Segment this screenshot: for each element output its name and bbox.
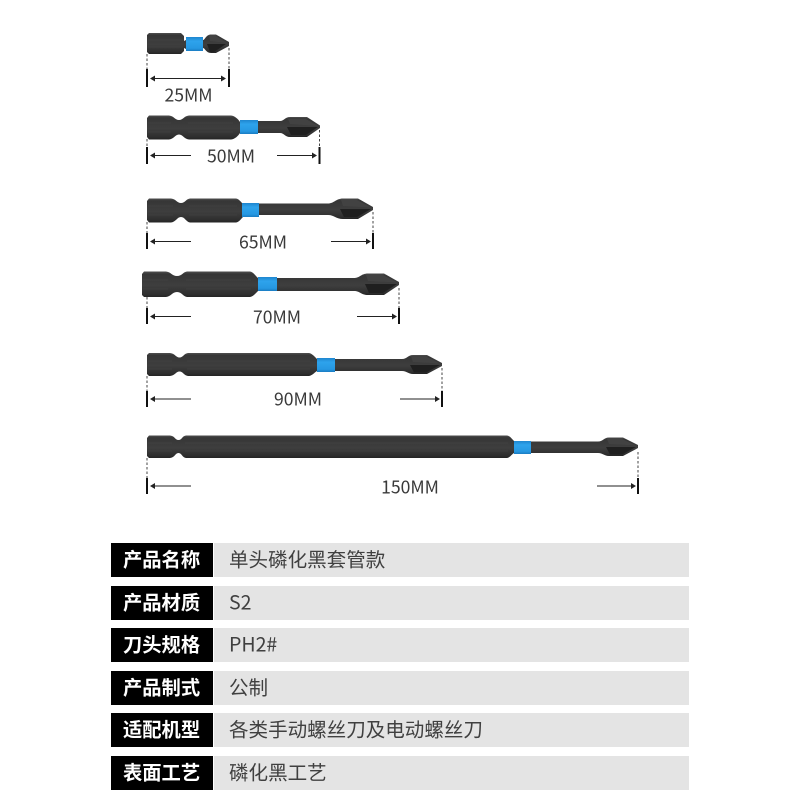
row: material: 产品材质: [123, 588, 200, 616]
bit: 65mm: [147, 198, 373, 222]
dimension: 50MM: 50MM: [207, 144, 255, 168]
row: surface finish: [111, 756, 689, 790]
row: product name: 单头磷化黑套管款: [229, 544, 385, 572]
bit: 50mm: [147, 116, 320, 140]
row: material: S2: [229, 586, 251, 616]
dimension: 90MM: [146, 368, 443, 412]
dimension: 150MM: [146, 452, 639, 500]
row: product name: [111, 543, 689, 577]
dimension: 50MM: [146, 130, 320, 168]
row: bit spec: [111, 628, 689, 662]
dimension: 150MM: 150MM: [381, 474, 439, 500]
row: bit spec: 刀头规格: [123, 630, 200, 658]
row: bit spec: PH2#: [229, 628, 277, 658]
dimension: 90MM: 90MM: [274, 386, 322, 412]
bit: 25mm: [147, 33, 229, 54]
row: surface finish: 表面工艺: [123, 758, 200, 786]
row: compatible tools: 各类手动螺丝刀及电动螺丝刀: [229, 714, 483, 742]
row: compatible tools: 适配机型: [123, 714, 200, 742]
bit: 150mm: [147, 436, 638, 458]
row: measurement system: 产品制式: [123, 672, 200, 700]
row: surface finish: 磷化黑工艺: [229, 756, 327, 786]
dimension: 65MM: [146, 212, 374, 254]
row: material: [111, 586, 689, 620]
row: measurement system: [111, 671, 689, 705]
spec table: [111, 543, 689, 790]
bit: 70mm: [142, 272, 399, 297]
dimension: 65MM: 65MM: [239, 230, 287, 254]
row: product name: 产品名称: [123, 544, 200, 572]
dimension: 25MM: [146, 48, 230, 108]
dimension: 70MM: [146, 288, 400, 330]
dimension: 70MM: 70MM: [253, 304, 301, 330]
row: compatible tools: [111, 713, 689, 747]
dimension: 25MM: 25MM: [164, 82, 213, 108]
row: measurement system: 公制: [229, 672, 268, 700]
bit: 90mm: [147, 353, 442, 376]
